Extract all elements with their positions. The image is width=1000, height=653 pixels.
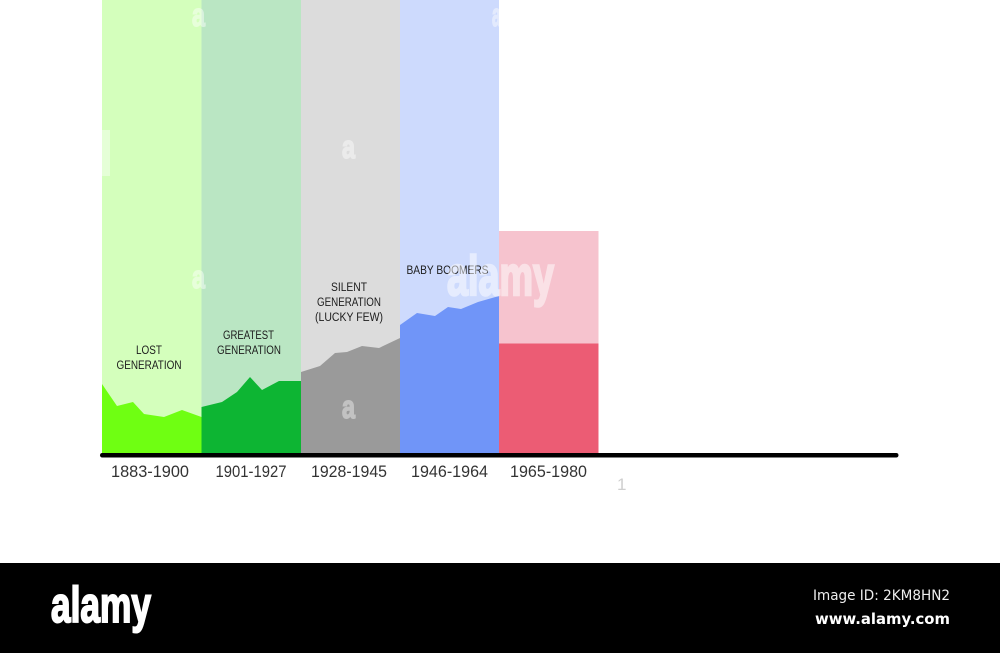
footer bar: [0, 563, 1000, 653]
label: baby boomers: BABY BOOMERS: [406, 265, 489, 277]
label: greatest generation: [217, 330, 281, 357]
image id: Image ID: 2KM8HN2: [813, 588, 950, 604]
panel: generation x: [499, 231, 598, 453]
faint stray numeral: 1: [617, 475, 626, 494]
label: lost generation: GENERATION: [116, 360, 182, 372]
year label: 1883-1900: 1883-1900: [111, 462, 189, 481]
year label: 1965-1980: 1965-1980: [510, 462, 587, 481]
watermark letters: a: [342, 129, 355, 165]
panel: greatest generation: [202, 0, 301, 453]
label: lost generation: LOST: [136, 345, 162, 357]
chart area: lost generation: [102, 384, 202, 453]
panel: baby boomers: [400, 0, 499, 453]
chart area: greatest generation: [202, 377, 301, 453]
footer logo: alamy: [51, 577, 151, 633]
label: silent generation: GENERATION: [317, 297, 381, 309]
chart area: baby boomers: [400, 296, 499, 453]
label: greatest generation: GREATEST: [223, 330, 274, 342]
watermark letters: a: [342, 389, 355, 425]
watermark letters: alamy: [447, 244, 554, 307]
year label: 1928-1945: 1928-1945: [311, 462, 387, 481]
panel: lost generation: [102, 0, 202, 453]
watermark letters: a: [192, 259, 205, 295]
chart area: silent generation: [301, 338, 400, 453]
label: silent generation: SILENT: [331, 282, 367, 294]
chart area: generation x: [499, 344, 598, 453]
watermark letters: [102, 0, 554, 425]
panel: silent generation: [301, 0, 400, 453]
year label: 1946-1964: 1946-1964: [411, 462, 488, 481]
timeline axis: [100, 453, 898, 458]
website: www.alamy.com: [815, 610, 950, 628]
label: greatest generation: GENERATION: [217, 345, 281, 357]
label: lost generation: [116, 345, 182, 372]
year label: 1901-1927: 1901-1927: [216, 462, 286, 481]
label: silent generation: [315, 282, 383, 324]
label: silent generation: (LUCKY FEW): [315, 312, 383, 324]
